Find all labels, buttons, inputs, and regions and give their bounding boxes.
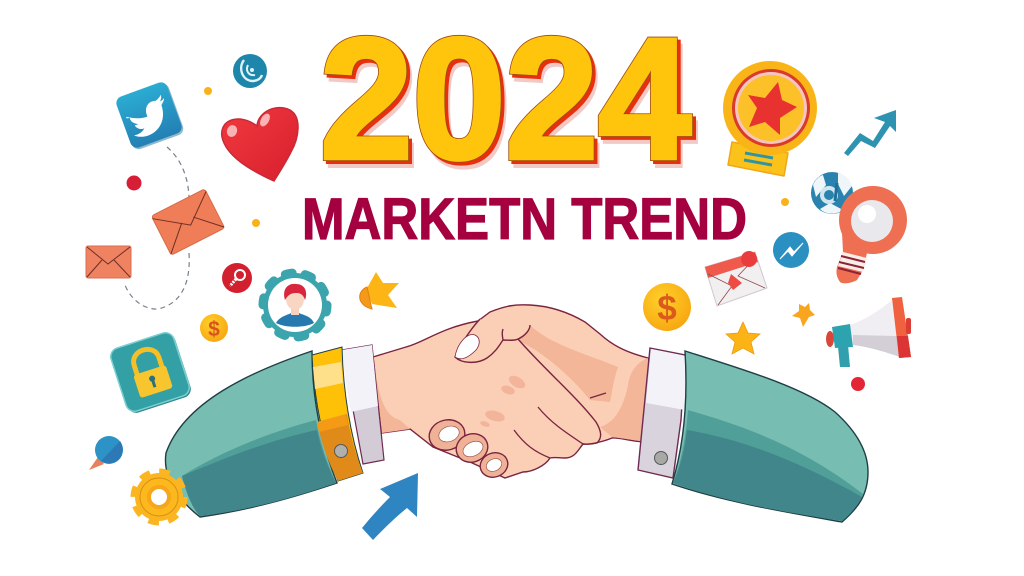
icon: pin <box>89 436 123 470</box>
icon: dollar coin left: $ <box>208 318 220 341</box>
dashed connector lines <box>125 147 189 309</box>
icon: messenger <box>773 232 809 268</box>
icon: mail with notification <box>705 251 767 306</box>
icon: bulb magnifier <box>836 186 907 283</box>
title: 2024: 2024 <box>323 6 694 198</box>
arm: right sleeve <box>638 348 868 522</box>
arm: left sleeve <box>165 351 337 517</box>
icon: star with cone <box>360 272 399 309</box>
icon: dollar coin right: $ <box>657 289 677 328</box>
icon: star badge <box>723 61 817 176</box>
knuckle marks <box>479 373 527 428</box>
arm: left cuff and band <box>312 345 384 481</box>
thumb <box>455 319 530 362</box>
icon: avatar gear <box>263 273 327 337</box>
title: 2024: 2024 <box>325 10 696 202</box>
icon: twitter <box>114 80 185 151</box>
icon: yellow gear <box>135 473 183 521</box>
dot <box>781 198 789 206</box>
icon: small star <box>792 303 815 327</box>
icon: dollar coin right <box>643 283 691 331</box>
dot <box>126 176 142 190</box>
icon: star <box>726 322 760 354</box>
icon: envelope tilted <box>151 189 225 255</box>
hand: clasped hands <box>373 305 648 481</box>
title: 2024: 2024 <box>320 3 691 195</box>
icon: blue arrow <box>362 473 418 540</box>
icon: megaphone <box>826 297 911 367</box>
dot <box>851 377 865 391</box>
subtitle: MARKETN TREND: MARKETN TREND <box>302 187 747 252</box>
icon: red circle link <box>222 263 252 293</box>
icon: globe <box>811 172 853 214</box>
hand shading <box>373 325 648 442</box>
icon: padlock tile <box>108 330 193 415</box>
icon: envelope small <box>86 246 131 278</box>
dot <box>252 219 260 227</box>
icon: spiral badge <box>233 54 267 88</box>
icon: dollar coin left <box>200 314 228 342</box>
title: 2024: 2024 <box>320 3 691 195</box>
icon: growth arrow <box>844 110 896 156</box>
icon: heart <box>222 108 298 181</box>
dot <box>204 87 212 95</box>
fingers <box>426 416 468 454</box>
